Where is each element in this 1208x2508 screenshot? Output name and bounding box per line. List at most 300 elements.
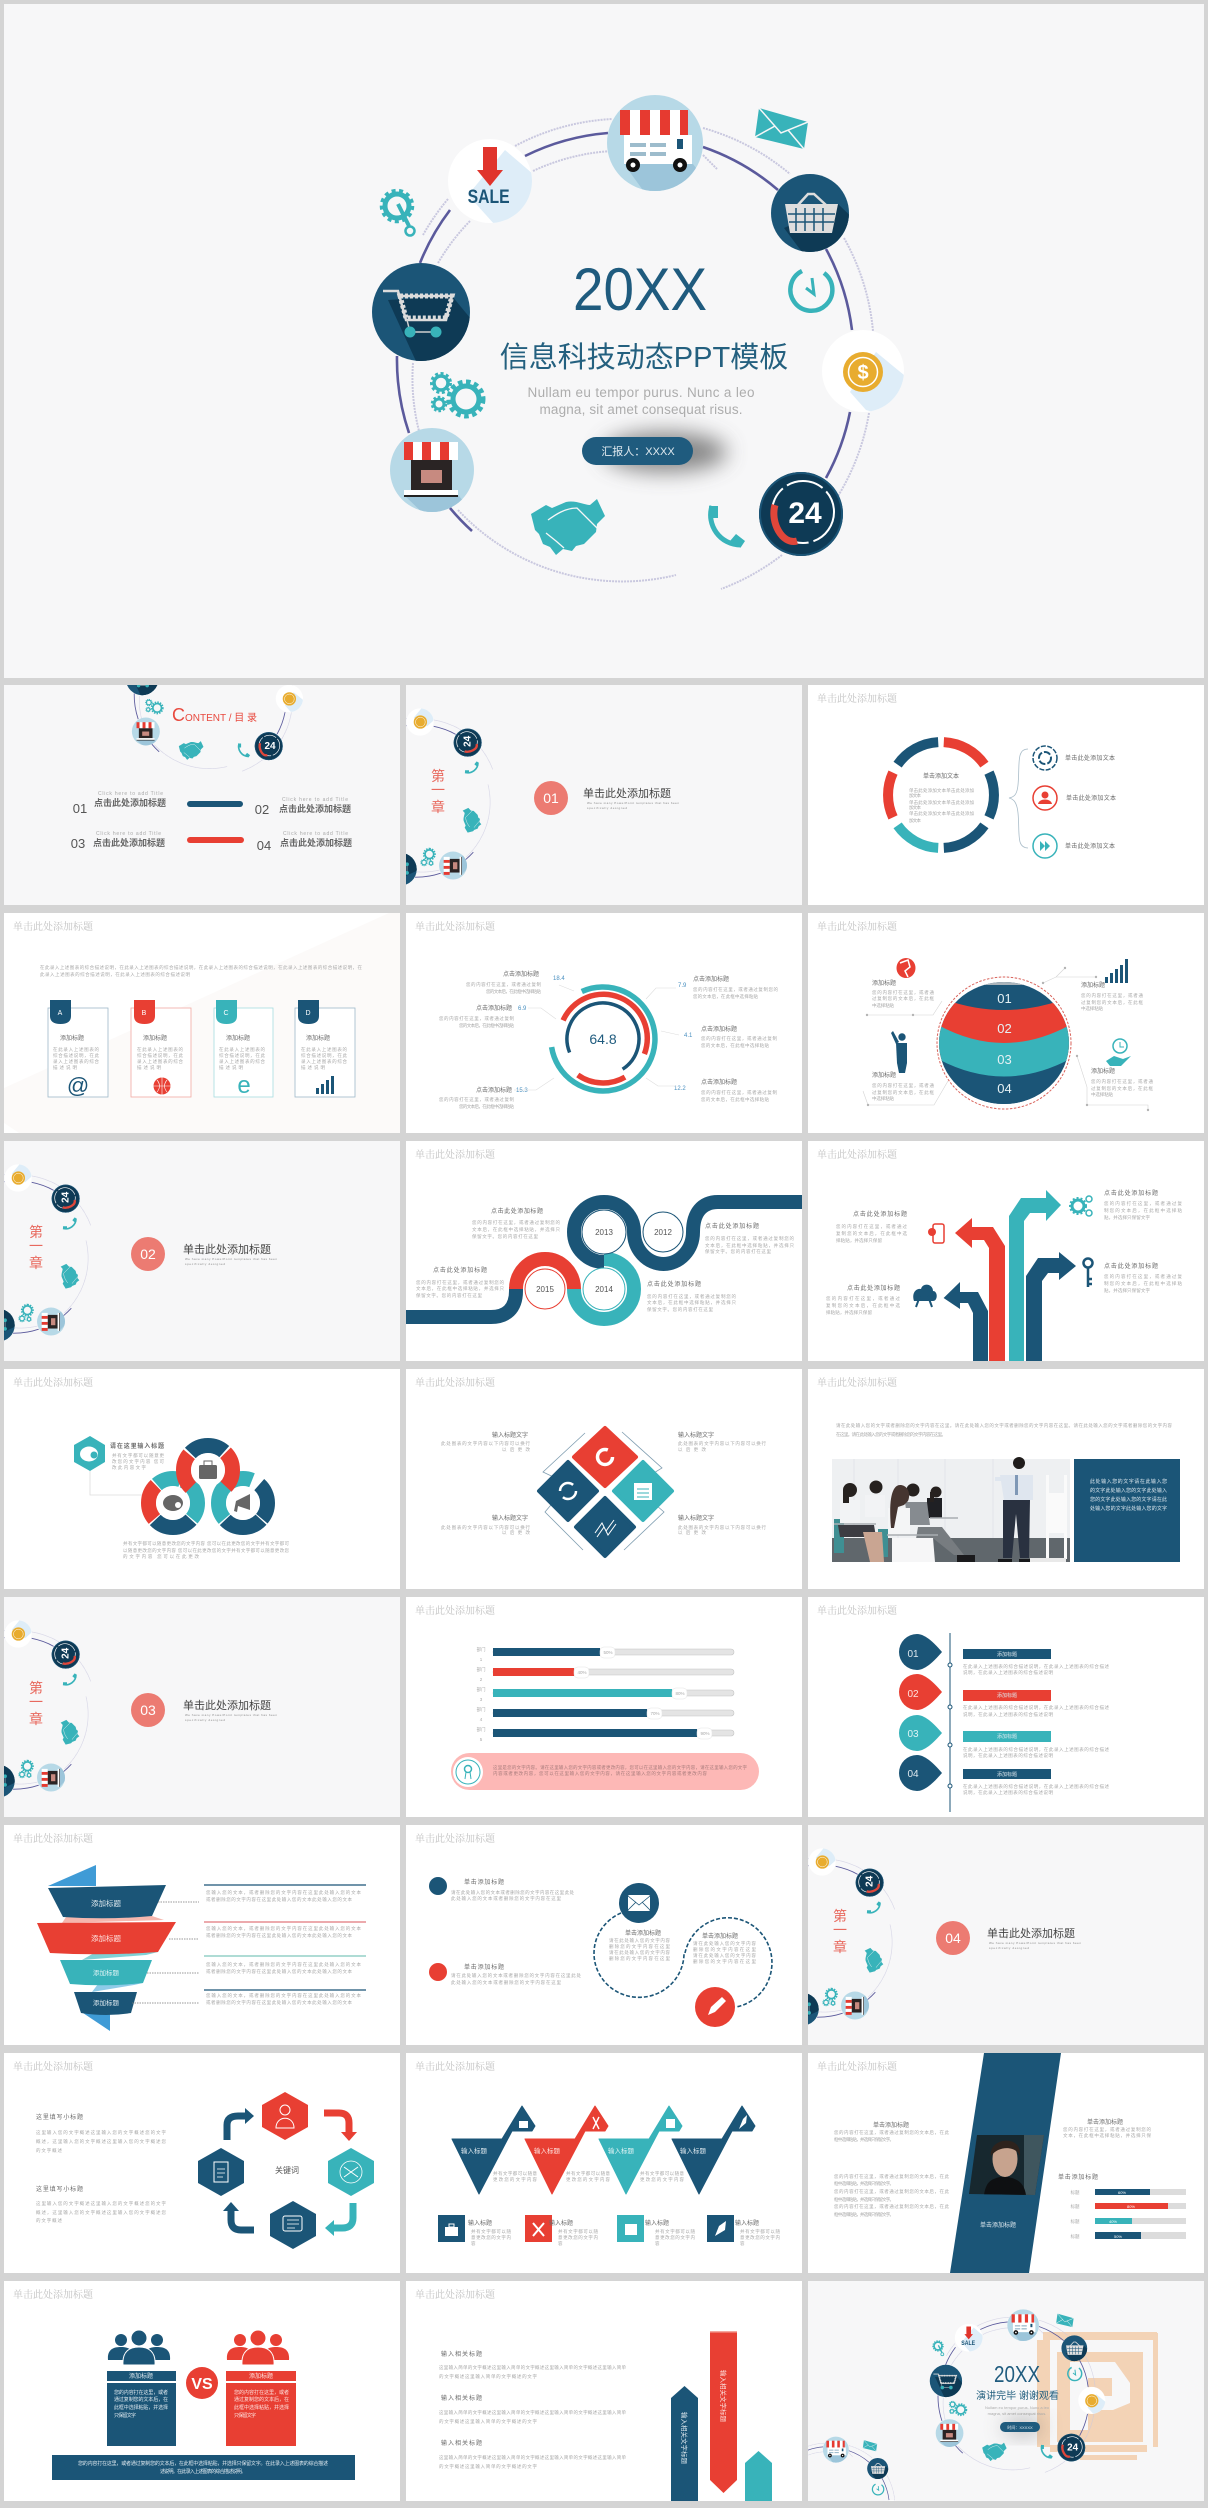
text block 1 (36, 2113, 166, 2154)
bar 2 (476, 1666, 734, 1682)
text box: 处输入您的文字此处输入您的文字 (1090, 1505, 1167, 1512)
thin curved arrows (543, 1432, 664, 1550)
text: top left: 添加标题 (872, 979, 896, 987)
ring text: 加文本 (909, 804, 922, 811)
column left: 通过复制您的文本后，在 (114, 2396, 168, 2403)
section title (183, 1242, 277, 1266)
text: top left (441, 1431, 530, 1453)
icon: briefcase (199, 1461, 217, 1479)
intro text (836, 1422, 1172, 1438)
description 3: 您输入您的文本，或者删除您的文字内容在这里此处输入您的文本 (206, 1961, 362, 1968)
label 6.9: 您的文本后，在此框中选择粘贴 (459, 1022, 514, 1029)
triangle 4 (672, 2106, 755, 2194)
bar 5 (476, 1726, 734, 1742)
label 4.1: 您的文本后，在此框中选择粘贴 (701, 1042, 770, 1049)
text block 2: 的文字概述这里输入简单的文字概述的文字 (439, 2418, 538, 2425)
tile 3: 容 (655, 2240, 660, 2247)
heading: 单击此处添加标题 (415, 920, 495, 933)
panel: arrows (808, 1141, 1204, 1361)
icon: pencil (695, 1987, 735, 2027)
card A: A (58, 1010, 63, 1017)
VS badge (186, 2367, 218, 2399)
text block 1: 的文字概述 (36, 2147, 62, 2154)
text block 1: 这里输入简单的文字概述这里输入简单的文字概述这里输入简单的文字概述这里输入简单 (439, 2364, 626, 2371)
arrow: navy bottom (223, 2202, 254, 2230)
left loop text: 单击添加标题 (625, 1929, 661, 1937)
text: bottom left: 输入标题文字 (492, 1514, 528, 1522)
section title: We have many PowerPoint templates that has been (185, 1713, 277, 1717)
presenter pill (582, 432, 727, 472)
text: upper left: 复制您的文本后，在此框中选 (836, 1230, 908, 1237)
pink callout (451, 1753, 759, 1790)
text block top left: 文本后，在此框中选择粘贴，并选择只 (472, 1226, 560, 1233)
card C: 综合描述说明，在此 (219, 1052, 266, 1059)
text: top left: 中选择粘贴 (872, 1002, 894, 1009)
text block 1: 这里填写小标题 (36, 2113, 83, 2121)
card D: 综合描述说明，在此 (301, 1052, 348, 1059)
top ring (184, 1446, 232, 1494)
item 04 (257, 831, 352, 853)
panel: section 03 (4, 1597, 400, 1817)
bar 4: 部门 (476, 1706, 486, 1713)
text block right: 您的内容打在这里，或者通过复制您的 (705, 1235, 794, 1242)
diamond: teal (614, 1462, 672, 1520)
text beside hexagon: 并有文字都可以随意更 (112, 1452, 164, 1459)
section title: We have many PowerPoint templates that has been (185, 1257, 277, 1261)
tile 3: 意更改您的文字内 (655, 2234, 696, 2241)
bullet: navy: 单击添加标题 (464, 1878, 504, 1886)
bar 5: 90% (700, 1731, 710, 1736)
chapter label (431, 768, 445, 815)
panel: contents (4, 685, 400, 905)
item: user (1033, 786, 1116, 810)
icon: globe (896, 958, 916, 978)
section title (183, 1698, 277, 1722)
text block lower left (416, 1266, 504, 1299)
tile 1: 意更改您的文字内 (471, 2234, 512, 2241)
triangle 3: 并有文字都可以随意 (640, 2170, 684, 2177)
section number: 01 (543, 790, 559, 806)
card A: 录入上述图表的综合 (53, 1058, 100, 1065)
node 01 (899, 1634, 1110, 1676)
year 2013 (582, 1210, 626, 1254)
year 2015: 2015 (536, 1285, 554, 1294)
panel: slanted band profile (808, 2053, 1204, 2273)
arc chart (552, 987, 655, 1091)
text box: 的文字此处输入您的文字此处输入 (1090, 1487, 1167, 1494)
panel: three arrows (406, 2281, 802, 2501)
left loop text (609, 1929, 670, 1962)
item 01: 01 (73, 801, 87, 816)
bar rows: 标题 (1070, 2233, 1080, 2240)
text block 2: 的文字概述 (36, 2217, 62, 2224)
label 4.1: 点击添加标题 (701, 1025, 737, 1033)
card A (48, 1000, 108, 1098)
text: top right: 以后更改 (678, 1446, 706, 1453)
text: bottom right: 添加标题 (1091, 1067, 1115, 1075)
description text: Nullam eu tempor purus. Nunc a leo (528, 385, 754, 400)
label 4.1: 4.1 (684, 1033, 693, 1039)
left loop text: 请在此处输入您的文字内容 (609, 1949, 670, 1956)
bullet: red: 此处输入您的文本或者删除您的文字内容在这里 (451, 1979, 562, 1986)
heading: 单击此处添加标题 (13, 1376, 93, 1389)
icon: megaphone (234, 1494, 250, 1512)
mini icon ring: 24 (265, 741, 276, 752)
bar 2: 部门 (476, 1666, 486, 1673)
node 02 (899, 1674, 1110, 1718)
hexagon: shuffle (328, 2148, 374, 2196)
closing icon ring: 24 (1067, 2443, 1079, 2454)
text block lower right (647, 1280, 736, 1313)
text: lower left: 您的内容打在这里，或者通过 (826, 1295, 900, 1302)
text block 3: 的文字概述这里输入简单的文字概述的文字 (439, 2463, 538, 2470)
triangle 3: 输入标题 (608, 2146, 634, 2155)
closing pill (1000, 2420, 1043, 2434)
card D: 在此录入上述图表的 (301, 1046, 348, 1053)
portrait (969, 2135, 1044, 2195)
rotated icon ring (328, 706, 493, 886)
card C: C (223, 1010, 229, 1017)
icon: clock hand (1106, 1039, 1131, 1066)
item 03: 03 (71, 836, 85, 851)
text left body (834, 2173, 950, 2218)
bullet: navy: 此处输入您的文本或者删除您的文字内容在这里 (451, 1895, 562, 1902)
label 15.3: 您的内容打在这里，或者通过复制 (439, 1096, 514, 1103)
tile 3 (617, 2215, 696, 2247)
diamond: bottom navy (576, 1498, 634, 1556)
label 7.9: 点击添加标题 (693, 975, 729, 983)
label 7.9: 您的内容打在这里，或者通过复制您的 (693, 986, 778, 993)
text: bottom right: 输入标题文字 (678, 1514, 714, 1522)
section title (583, 786, 679, 810)
card C: e (237, 1072, 251, 1099)
text block 2 (36, 2185, 166, 2224)
text block 1: 概述，这里输入您的文字概述这里输入您的文字概述您 (36, 2138, 166, 2145)
rotated icon ring (730, 1846, 895, 2026)
ring text: 单击此处添加文本单击此处添加 (909, 810, 974, 817)
icon: cloud (913, 1285, 937, 1307)
heading: 单击此处添加标题 (817, 1376, 897, 1389)
contents heading: CONTENT / 目 录 (172, 705, 257, 725)
card D: 添加标题 (306, 1034, 330, 1042)
item 03: 点击此处添加标题 (93, 837, 165, 848)
heading: 单击此处添加标题 (415, 2060, 495, 2073)
text: bottom left (441, 1514, 530, 1536)
bottom text: 以随意更改您的文字内容 您可以在此更改您的文字并有文字都可以随意更改您 (123, 1547, 290, 1554)
label 12.2: 您的文本后，在此框中选择粘贴 (701, 1096, 770, 1103)
chapter label: 第 (29, 1680, 43, 1696)
ring text: 加文本 (909, 817, 922, 824)
item 02 (255, 797, 351, 817)
node 03: 03 (907, 1729, 919, 1740)
keyword: 关键词 (275, 2165, 299, 2175)
text: bottom left: 中选择粘贴 (872, 1095, 894, 1102)
item 04: 点击此处添加标题 (280, 837, 352, 848)
bar rows: 标题 (1070, 2218, 1080, 2225)
section title: We have many PowerPoint templates that has been (989, 1941, 1081, 1945)
section title: 单击此处添加标题 (183, 1242, 271, 1256)
intro text: 在此录入上述图表的综合描述说明，在此录入上述图表的综合描述说明，在此录入上述图表的综合描述说明，在此录入上述图表的综合描述说明，在 (40, 964, 362, 971)
rotated icon ring (0, 1162, 91, 1342)
tile 4: 输入标题 (735, 2219, 759, 2227)
card B: 在此录入上述图表的 (137, 1046, 184, 1053)
text: top right: 您的内容打在这里，或者通过复 (1104, 1200, 1182, 1207)
section title: 单击此处添加标题 (583, 786, 671, 800)
timeline axis (948, 1633, 952, 1812)
text: lower left: 复制您的文本后，在此框中选 (826, 1302, 900, 1309)
text block 3: 这里输入简单的文字概述这里输入简单的文字概述这里输入简单的文字概述这里输入简单 (439, 2454, 626, 2461)
arrow: navy up (671, 2386, 698, 2501)
text: top right: 制您的文本后，在此框中选择粘 (1104, 1207, 1182, 1214)
text: top right: 点击此处添加标题 (1104, 1189, 1158, 1197)
text: top right (1104, 1189, 1182, 1221)
chapter label (833, 1908, 847, 1955)
text: bottom left: 添加标题 (872, 1071, 896, 1079)
heading: 单击此处添加标题 (817, 920, 897, 933)
heading: 单击此处添加标题 (415, 2288, 495, 2301)
panel: ring diagram (808, 685, 1204, 905)
diamond: left navy (539, 1462, 597, 1520)
bar 5: 部门 (476, 1726, 486, 1733)
pink callout: 这里是您的文字内容。请在这里输入您的文字内容或者更改内容，您可以在这里输入您的文字内容，请在这里输入您的文字 (493, 1764, 748, 1771)
tile 3: 并有文字都可以随 (655, 2228, 696, 2235)
bar 1: 1 (480, 1657, 483, 1662)
column right: 只保留文字 (234, 2412, 256, 2419)
card C: 在此录入上述图表的 (219, 1046, 266, 1053)
heading: 单击此处添加标题 (817, 1148, 897, 1161)
description text: magna, sit amet consequat risus. (540, 402, 742, 417)
tile 2: 意更改您的文字内 (558, 2234, 598, 2241)
item 02: 点击此处添加标题 (279, 803, 351, 814)
icon: palette (163, 1495, 183, 1511)
description text (528, 385, 754, 417)
bar 1: 50% (603, 1650, 613, 1655)
text beside hexagon: 改您的文字内容 您可 (112, 1458, 164, 1465)
icon: navy people (108, 2330, 170, 2365)
text: right (1104, 1262, 1182, 1294)
text block right (705, 1222, 794, 1255)
text: top left (872, 979, 934, 1009)
text: lower left (826, 1284, 900, 1316)
panel: progress bars (406, 1597, 802, 1817)
right loop text: 删除您的文字内容在这里 (693, 1958, 756, 1965)
triangle 2 (525, 2106, 610, 2194)
text block 2: 输入相关标题 (441, 2394, 482, 2402)
column left: 只保留文字 (114, 2412, 136, 2419)
item 01: Click here to add Title (98, 791, 163, 797)
label 4.1: 您的内容打在这里，或者通过复制 (701, 1035, 778, 1042)
panel: section 02 (4, 1141, 400, 1361)
segmented ring (888, 742, 994, 848)
text: bottom right: 您的内容打在这里，或者通 (1091, 1078, 1154, 1085)
hexagon: chat (270, 2201, 316, 2249)
ring text: 加文本 (909, 792, 922, 799)
triangle 2: 更改您的文字内容 (566, 2176, 610, 2183)
card D (295, 1000, 355, 1097)
sphere labels: 02 (997, 1021, 1012, 1036)
rotated icon ring: 24 (865, 1875, 876, 1887)
tile 2 (525, 2215, 598, 2247)
column left: 添加标题 (129, 2372, 153, 2380)
text: bottom right (1091, 1067, 1154, 1098)
text box: 您的文字此处输入您的文字请在此 (1090, 1496, 1167, 1503)
bar 3 (476, 1686, 734, 1702)
right loop text: 请在此处输入您的文字内容 (693, 1940, 756, 1947)
right loop text: 请在此处输入您的文字内容 (693, 1952, 756, 1959)
bars heading: 单击添加标题 (1058, 2173, 1098, 2181)
card C: 添加标题 (226, 1034, 250, 1042)
description 4: 您输入您的文本，或者删除您的文字内容在这里此处输入您的文本 (206, 1992, 362, 1999)
label 15.3: 您的文本后，在此框中选择粘贴 (459, 1103, 514, 1110)
node 01: 说明，在此录入上述图表的综合描述说明 (963, 1669, 1054, 1676)
funnel layer 1 (48, 1885, 166, 1918)
bullet: navy (429, 1877, 574, 1902)
arrow: red left (955, 1218, 1005, 1361)
card D: 录入上述图表的综合 (301, 1058, 348, 1065)
text left body: 框中选择粘贴，并选择只保留文字。 (834, 2211, 894, 2218)
text: top right: 您的内容打在这里，或者通 (1081, 992, 1144, 999)
tile 2: 并有文字都可以随 (558, 2228, 598, 2235)
label 12.2: 点击添加标题 (701, 1078, 737, 1086)
label 18.4 (466, 970, 565, 995)
bar 3: 部门 (476, 1686, 486, 1693)
ring of ecommerce icons: 24 (788, 497, 822, 530)
triangle 1: 输入标题 (461, 2146, 488, 2155)
triangle 2: 并有文字都可以随意 (566, 2170, 610, 2177)
funnel folds (48, 1865, 164, 2031)
label 6.9: 点击添加标题 (476, 1004, 512, 1012)
text: bottom right: 此处图表的文字内容以下内容可以换行 (678, 1524, 766, 1531)
heading: 单击此处添加标题 (415, 1376, 495, 1389)
hexagon badge (74, 1436, 105, 1471)
ring text: 单击添加文本 (923, 772, 959, 780)
description 2: 您输入您的文本，或者删除您的文字内容在这里此处输入您的文本 (206, 1925, 362, 1932)
icon: person (891, 1031, 907, 1073)
description 1: 或者删除您的文字内容在这里此处输入您的文本此处输入您的文本 (206, 1896, 352, 1903)
tile 2: 容 (558, 2240, 563, 2247)
chapter label: 一 (29, 1694, 43, 1710)
text right top: 单击添加标题 (1087, 2118, 1123, 2126)
panel: VS comparison (4, 2281, 400, 2501)
chapter label: 一 (833, 1922, 847, 1938)
section title (987, 1926, 1081, 1950)
item: refresh: 单击此处添加文本 (1065, 754, 1115, 762)
card C (214, 1000, 273, 1099)
text: lower left: 点击此处添加标题 (847, 1284, 900, 1292)
bar rows: 60% (1118, 2190, 1126, 2195)
node 01: 在此录入上述图表的综合描述说明，在此录入上述图表的综合描述 (963, 1663, 1110, 1670)
column left: 您的内容打在这里，或者 (114, 2389, 168, 2396)
text: top right: 此处图表的文字内容以下内容可以换行 (678, 1440, 766, 1447)
heading: 单击此处添加标题 (415, 1604, 495, 1617)
card B: 添加标题 (143, 1034, 167, 1042)
text left body: 您的内容打在这里，或者通过复制您的文本后，在此 (834, 2203, 950, 2210)
text: upper left: 点击此处添加标题 (853, 1210, 907, 1218)
section number (131, 1237, 165, 1271)
icon: key (1084, 1258, 1092, 1287)
text block right: 点击此处添加标题 (705, 1222, 759, 1230)
red bar (187, 837, 244, 843)
column left (107, 2371, 176, 2446)
funnel layer 4 (74, 1992, 137, 2015)
text block 2: 这里填写小标题 (36, 2185, 83, 2193)
arrow: red down (710, 2331, 737, 2493)
closing description: magna, sit amet consequat risus. (988, 2411, 1046, 2416)
card A: 添加标题 (60, 1034, 84, 1042)
card C: 录入上述图表的综合 (219, 1058, 266, 1065)
text: bottom left: 您的内容打在这里，或者通 (872, 1082, 934, 1089)
text block 1: 输入相关标题 (441, 2350, 482, 2358)
rotated icon ring (0, 1618, 91, 1798)
description 2: 或者删除您的文字内容在这里此处输入您的文本此处输入您的文本 (206, 1932, 352, 1939)
heading: 单击此处添加标题 (415, 1148, 495, 1161)
triangle 1: 更改您的文字内容 (493, 2176, 538, 2183)
text beside hexagon: 请在这里输入标题 (110, 1442, 164, 1450)
label 18.4: 您的内容打在这里，或者通过复制 (466, 981, 542, 988)
year 2012 (643, 1212, 683, 1252)
card B: 综合描述说明，在此 (137, 1052, 184, 1059)
heading: 单击此处添加标题 (13, 2060, 93, 2073)
bar 3: 80% (675, 1691, 685, 1696)
label 7.9: 您的文本后，在此框中选择粘贴 (693, 993, 758, 1000)
panel: concentric arcs (406, 913, 802, 1133)
closing subtitle: 演讲完毕 谢谢观看 (976, 2389, 1059, 2402)
bar 4 (476, 1706, 734, 1722)
ring text: 单击此处添加文本单击此处添加 (909, 799, 974, 806)
watermark stamp (1037, 2332, 1158, 2460)
text block lower right: 点击此处添加标题 (647, 1280, 701, 1288)
label 15.3: 15.3 (516, 1088, 528, 1094)
centre value: 64.8 (589, 1031, 617, 1047)
chapter label: 章 (29, 1711, 43, 1727)
left loop text: 删除您的文字内容在这里 (609, 1943, 670, 1950)
label 18.4: 点击添加标题 (503, 970, 539, 978)
tile 1: 输入标题 (468, 2219, 492, 2227)
text left top: 框中选择粘贴，并选择只保留文字。 (834, 2136, 894, 2143)
chapter label: 第 (833, 1908, 847, 1924)
arrow: navy right (1026, 1252, 1076, 1361)
rotated icon ring: 24 (61, 1191, 72, 1203)
card B: 录入上述图表的综合 (137, 1058, 184, 1065)
column right: 通过复制您的文本后，在 (234, 2396, 289, 2403)
right loop text (693, 1932, 756, 1965)
text right top: 文本，在此框中选择粘贴，并选择只保 (1063, 2132, 1152, 2139)
text left top: 您的内容打在这里，或者通过复制您的文本后，在此 (834, 2129, 950, 2136)
bottom text: 并有文字都可以随意更改您的文字内容 您可以在此更改您的文字并有文字都可 (123, 1540, 290, 1547)
node 03: 说明，在此录入上述图表的综合描述说明 (963, 1752, 1054, 1759)
text beside hexagon (110, 1442, 164, 1471)
item 04: Click here to add Title (283, 831, 348, 837)
card B: B (142, 1010, 147, 1017)
dashed loops (594, 1913, 772, 2007)
heading: 单击此处添加标题 (13, 920, 93, 933)
item 03: Click here to add Title (96, 831, 161, 837)
panel: section 04 (808, 1825, 1204, 2045)
panel: hexagon cycle (4, 2053, 400, 2273)
bar rows: 标题 (1070, 2189, 1080, 2196)
panel: four cards (4, 913, 400, 1133)
arrow: teal up (745, 2451, 772, 2501)
bottom text (123, 1540, 290, 1560)
text block top left (472, 1207, 560, 1240)
right loop text: 删除您的文字内容在这里 (693, 1946, 756, 1953)
card A: 描述说明 (53, 1064, 78, 1071)
funnel layer 3 (60, 1960, 152, 1985)
chapter label: 第 (29, 1224, 43, 1240)
arrow: teal (325, 2203, 353, 2236)
text block top left: 您的内容打在这里，或者通过复制您的 (472, 1219, 560, 1226)
triangle 1: 并有文字都可以随意 (493, 2170, 538, 2177)
